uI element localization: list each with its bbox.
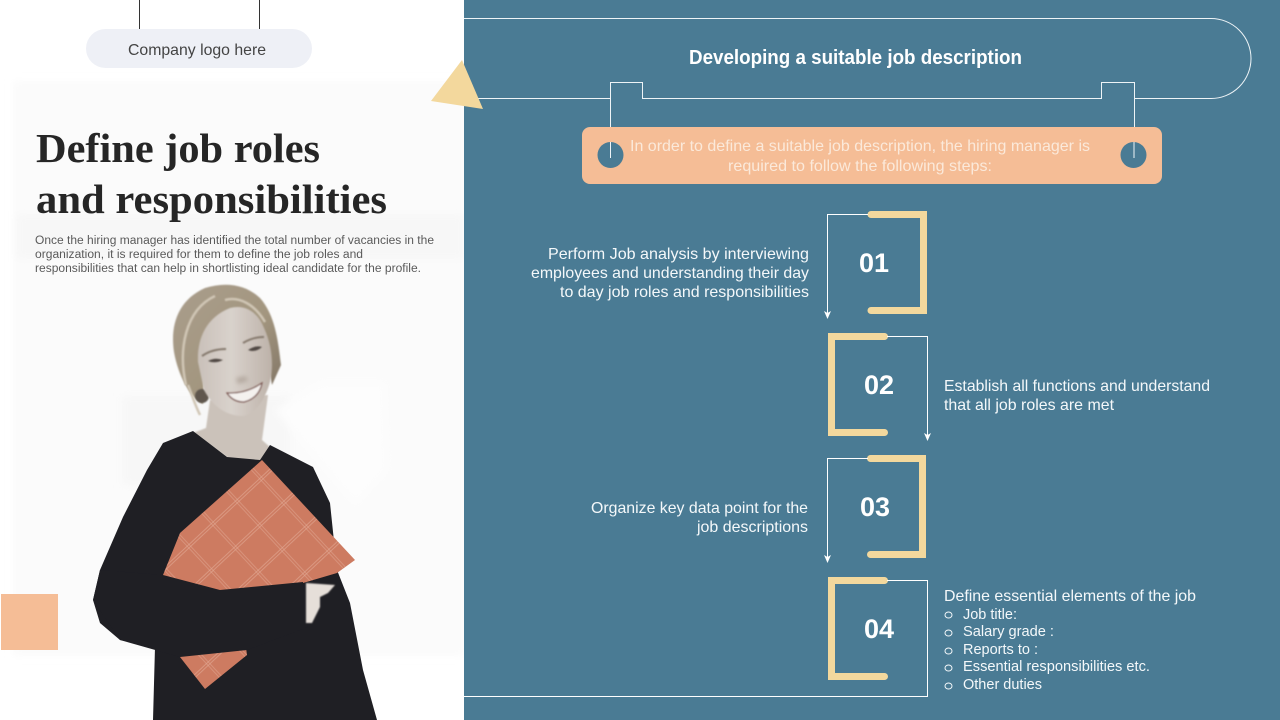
arrow 01 (824, 214, 868, 319)
hair back (173, 285, 281, 404)
heading: Developing a suitable job description (689, 47, 1022, 69)
text 04: Define essential elements of the job (944, 588, 1196, 605)
intro paragraph (35, 235, 434, 275)
hair front strands (183, 296, 265, 415)
left hole (598, 142, 624, 168)
teal right panel (464, 0, 1280, 720)
bullet list (945, 606, 1150, 693)
face (198, 307, 272, 416)
right hole (1120, 142, 1146, 168)
body sweater (93, 431, 377, 720)
logo connector lines (140, 0, 260, 29)
text 04 (944, 588, 1196, 693)
step 03 (591, 458, 922, 563)
bracket 02 (832, 336, 884, 432)
smile (227, 383, 262, 402)
bullet list: Salary grade : (963, 623, 1054, 640)
company logo pill: Company logo here (128, 42, 266, 59)
bracket 04 (832, 580, 884, 676)
bullet list: Essential responsibilities etc. (963, 658, 1150, 675)
header outline shape (464, 18, 1251, 127)
text 03: job descriptions (696, 519, 808, 536)
text 03: Organize key data point for the (591, 500, 808, 517)
hand (306, 583, 335, 623)
step 01 (531, 214, 924, 319)
eyebrows (202, 337, 264, 356)
callout text (630, 138, 1090, 175)
arrow 02 (887, 336, 931, 441)
number 04: 04 (864, 614, 894, 644)
connector line 04 (464, 580, 928, 696)
title: and responsibilities (36, 176, 387, 222)
yellow triangle accent (431, 60, 483, 109)
arm (93, 570, 308, 657)
left background panel (0, 0, 464, 720)
folder (163, 460, 355, 689)
company logo pill (86, 29, 312, 68)
intro paragraph: Once the hiring manager has identified the total number of vacancies in the (35, 235, 434, 247)
title: Define job roles (36, 125, 320, 171)
step 04 (464, 580, 1196, 696)
text 01 (531, 246, 809, 301)
neck and chest (193, 395, 271, 462)
bullet list: Reports to : (963, 641, 1038, 658)
arrow 03 (824, 458, 868, 563)
bracket 03 (870, 458, 922, 554)
callout text: In order to define a suitable job description, the hiring manager is (630, 138, 1090, 155)
text 02 (944, 378, 1210, 414)
peach square accent (1, 594, 58, 650)
text 01: Perform Job analysis by interviewing (548, 246, 809, 263)
text 02: Establish all functions and understand (944, 378, 1210, 395)
text 03 (591, 500, 808, 536)
callout text: required to follow the following steps: (728, 158, 992, 175)
nose shadow (236, 376, 248, 384)
number 02: 02 (864, 370, 894, 400)
number 03: 03 (860, 492, 890, 522)
text 01: employees and understanding their day (531, 265, 809, 282)
intro paragraph: responsibilities that can help in shortlisting ideal candidate for the profile. (35, 263, 421, 275)
eyes (208, 346, 262, 362)
number 01: 01 (859, 248, 889, 278)
bullet list: Other duties (963, 676, 1042, 693)
title (36, 125, 387, 222)
step 02 (832, 336, 1210, 441)
photo: smiling woman holding folder (93, 285, 377, 720)
bracket 01 (871, 214, 924, 310)
intro paragraph: organization, it is required for them to define the job roles and (35, 249, 363, 261)
text 01: to day job roles and responsibilities (560, 284, 809, 301)
text 02: that all job roles are met (944, 397, 1115, 414)
hair bun (195, 389, 209, 403)
callout: intro steps (582, 127, 1162, 184)
bullet list: Job title: (963, 606, 1017, 623)
